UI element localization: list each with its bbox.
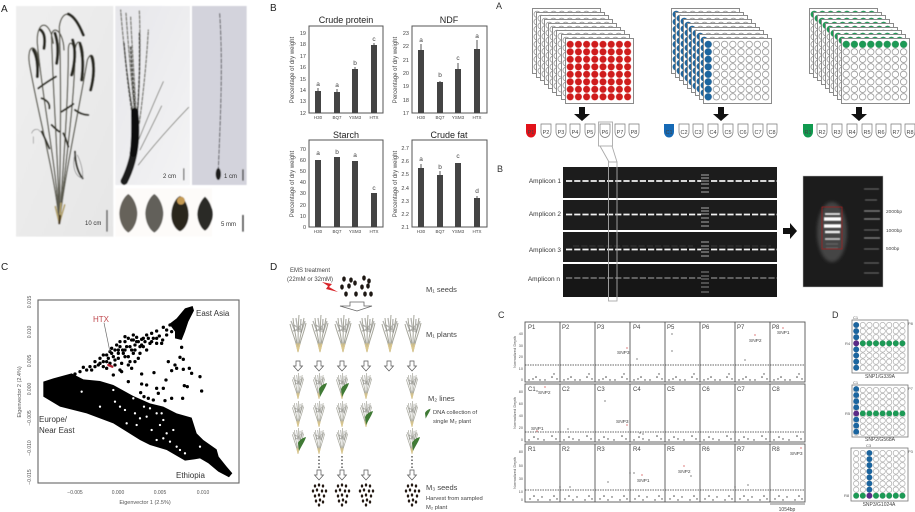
label: Amplicon 3: Amplicon 3 (529, 247, 561, 254)
scale label: 2 cm: 2 cm (163, 174, 176, 180)
chart: crude fat: a (419, 156, 423, 163)
chart: crude fat: 2.1 (401, 225, 409, 231)
chart: crude fat: 2.3 (401, 199, 409, 205)
panel label: left A: A (1, 4, 8, 15)
arrow: seeds to plants (340, 302, 372, 311)
plate: SNP3/G1024A (844, 443, 914, 508)
photo: spike with awns (115, 6, 190, 185)
chart: normalized depth small multiples: 20 (519, 355, 523, 359)
tubes: C1 to C8 (664, 124, 777, 138)
chart: normalized depth small multiples: C3 (597, 387, 605, 393)
label: Amplicon 1: Amplicon 1 (529, 178, 561, 185)
chart: NDF: 23 (403, 31, 409, 37)
dotted continuation (319, 456, 412, 468)
chart: crude protein: H30 (314, 115, 323, 120)
plate: SNP1/G339A: C1 (853, 315, 859, 320)
chart: crude protein: HTX (370, 115, 378, 120)
tubes: P1 to P8: P4 (572, 130, 578, 136)
chart: normalized depth small multiples: R4 (633, 447, 641, 453)
chart: normalized depth small multiples: P7 (737, 325, 745, 331)
chart: PCA scatter: −0.005 (27, 410, 33, 426)
chart: NDF: NDF (440, 15, 459, 25)
chart: normalized depth small multiples: P8 (772, 325, 780, 331)
chart: starch: 30 (300, 191, 306, 197)
chart: normalized depth small multiples: P3 (597, 325, 605, 331)
chart: normalized depth small multiples: 50 (519, 464, 523, 468)
chart: normalized depth small multiples: SNP2 (749, 338, 762, 344)
highlighted lane from P6 tube to gels (598, 122, 617, 301)
chart: starch: a (316, 150, 320, 157)
arrow: to enlarged gel (783, 223, 797, 239)
legend: DNA collection: DNA collection of (433, 410, 478, 416)
chart: crude protein: Crude protein (319, 15, 373, 25)
gel: amplicon panels (563, 167, 777, 297)
chart: starch: 10 (300, 214, 306, 220)
chart: PCA scatter: 0.000 (27, 383, 33, 395)
chart: normalized depth small multiples: C7 (737, 387, 745, 393)
tubes: P1 to P8: P1 (528, 130, 534, 136)
tubes: C1 to C8: C8 (768, 130, 776, 136)
label: 500bp: 500bp (886, 246, 900, 252)
chart: starch: 40 (300, 180, 306, 186)
chart: normalized depth small multiples: 40 (519, 414, 523, 418)
chart: crude protein: 15 (300, 77, 306, 83)
label: M3 seeds: M₃ seeds (426, 483, 458, 492)
chart: normalized depth small multiples: 30 (519, 344, 523, 348)
plate stack: blue, column pool (672, 8, 772, 104)
chart: NDF (393, 15, 487, 120)
chart: normalized depth small multiples: P1 (528, 325, 536, 331)
chart: crude protein: YSM3 (349, 115, 362, 120)
chart: crude fat: c (456, 153, 460, 160)
chart: crude fat: 2.2 (401, 212, 409, 218)
chart: PCA scatter: Ethiopia (176, 471, 205, 480)
chart: normalized depth small multiples: R1 (528, 447, 536, 453)
diagram: EMS mutagenesis workflow (287, 268, 483, 511)
M3 seed clusters (312, 483, 420, 507)
chart: normalized depth small multiples: SNP2 (678, 469, 691, 475)
chart: PCA scatter: Eigenvector 2 (2.4%) (17, 366, 23, 418)
chart: normalized depth small multiples: 10 (519, 490, 523, 494)
chart: normalized depth small multiples: 60 (519, 402, 523, 406)
chart: crude fat: 2.7 (401, 146, 409, 152)
panel label: left C: C (1, 262, 8, 273)
chart: crude protein: BQ7 (332, 115, 342, 120)
chart: normalized depth small multiples: P5 (667, 325, 675, 331)
chart: PCA scatter: 0.005 (154, 490, 166, 496)
chart: PCA scatter: East Asia (196, 309, 230, 318)
chart: crude fat: Percentage of dry weight (393, 150, 399, 217)
chart: starch (290, 130, 383, 234)
chart: normalized depth small multiples: 0 (521, 438, 523, 442)
label: Amplicon 2: Amplicon 2 (529, 211, 561, 218)
plate: SNP1/G339A: P8 (908, 321, 914, 326)
chart: NDF: a (419, 37, 423, 44)
panel label: right A: A (496, 1, 502, 11)
scale label: 1 cm: 1 cm (224, 174, 237, 180)
chart: crude protein: 12 (300, 111, 306, 117)
plate: SNP2/G568A: C1 (853, 380, 859, 385)
chart: normalized depth small multiples: P2 (562, 325, 570, 331)
chart: crude fat: d (475, 188, 479, 195)
arrows: plates to tubes (574, 107, 867, 121)
chart: normalized depth small multiples: SNP1 (777, 330, 790, 336)
tubes: R1 to R8: R6 (877, 130, 885, 136)
chart: crude fat: 2.6 (401, 159, 409, 165)
chart: normalized depth small multiples: SNP2 (538, 390, 551, 396)
plate: SNP3/G1024A: P3 (908, 449, 914, 454)
label: 2000bp: 2000bp (886, 209, 902, 215)
chart: starch: 70 (300, 147, 306, 153)
chart: normalized depth small multiples: Normalized Depth (512, 457, 517, 489)
chart: crude protein: a (316, 81, 320, 88)
label: M1 seeds: M₁ seeds (426, 285, 457, 294)
chart: normalized depth small multiples: 10 (519, 367, 523, 371)
chart: PCA scatter: 0.015 (27, 296, 33, 308)
chart: NDF: 19 (403, 84, 409, 90)
tubes: P1 to P8: P2 (543, 130, 549, 136)
photo: whole plant (16, 6, 113, 237)
chart: crude protein: 17 (300, 54, 306, 60)
chart: crude fat: YSM3 (452, 229, 465, 234)
chart: crude protein: b (353, 60, 357, 67)
chart: starch: 0 (303, 225, 306, 231)
plate: SNP2/G568A: R5 (845, 411, 851, 416)
chart: NDF: BQ7 (435, 115, 445, 120)
arrows: M2 to M3 (314, 470, 416, 480)
chart: PCA scatter: Near East (39, 426, 75, 435)
tubes: R1 to R8: R7 (892, 130, 900, 136)
chart: normalized depth small multiples: R3 (597, 447, 605, 453)
panel label: B bars: B (270, 3, 277, 14)
chart: normalized depth small multiples: C2 (562, 387, 570, 393)
photo: four grains (106, 188, 244, 237)
chart: NDF: a (475, 33, 479, 40)
tubes: R1 to R8: R2 (818, 130, 826, 136)
text: harvest note: Harvest from sampled (426, 496, 483, 502)
chart: crude fat: Crude fat (430, 130, 468, 140)
gel: enlarged smear with ladder (803, 176, 883, 287)
panel label: right D: D (832, 310, 839, 320)
text: EMS treatment: (22mM or 32mM) (287, 277, 333, 283)
chart: starch: 60 (300, 158, 306, 164)
chart: crude protein: Percentage of dry weight (290, 36, 296, 103)
chart: crude fat: b (438, 164, 442, 171)
chart: normalized depth small multiples: 0 (521, 378, 523, 382)
chart: PCA scatter: Eigenvector 1 (2.5%) (119, 500, 171, 506)
chart: normalized depth small multiples: 30 (519, 477, 523, 481)
chart: normalized depth small multiples: Normalized Depth (512, 336, 517, 368)
chart: normalized depth small multiples: 80 (519, 450, 523, 454)
tubes: R1 to R8: R3 (833, 130, 841, 136)
chart: PCA scatter: 0.000 (112, 490, 124, 496)
tubes: R1 to R8: R8 (906, 130, 914, 136)
seeds: M1 seeds (340, 275, 373, 297)
chart: crude protein: 19 (300, 31, 306, 37)
chart: crude protein: a (335, 82, 339, 89)
chart: crude protein: c (372, 36, 376, 43)
chart: normalized depth small multiples: C1 (528, 387, 536, 393)
chart: crude fat: H30 (417, 229, 426, 234)
chart: normalized depth small multiples: R2 (562, 447, 570, 453)
chart: starch: Starch (333, 130, 359, 140)
plate: SNP2/G568A: SNP2/G568A (865, 437, 896, 443)
tubes: P1 to P8: P7 (617, 130, 623, 136)
chart: starch: H30 (314, 229, 323, 234)
tubes: P1 to P8: P8 (631, 130, 637, 136)
chart: crude protein: 18 (300, 42, 306, 48)
chart: crude protein: 13 (300, 99, 306, 105)
M1 plants row (290, 315, 421, 352)
chart: NDF: H30 (417, 115, 426, 120)
chart: normalized depth small multiples: SNP3 (616, 419, 629, 425)
chart: starch: YSM3 (349, 229, 362, 234)
chart: PCA scatter: 0.005 (27, 355, 33, 367)
label: 1000bp: 1000bp (886, 228, 902, 234)
tubes: P1 to P8: P5 (587, 130, 593, 136)
tubes: C1 to C8: C4 (709, 130, 717, 136)
plate stack: red, whole plate (532, 8, 634, 104)
panel label: right B: B (497, 164, 503, 174)
chart: starch: b (335, 149, 339, 156)
chart: starch: 50 (300, 169, 306, 175)
text: harvest note: M₂ plant (426, 505, 448, 511)
label: Amplicon n: Amplicon n (528, 276, 560, 283)
plate: SNP1/G339A (845, 315, 914, 380)
plate: SNP3/G1024A: R8 (844, 493, 850, 498)
plate: SNP3/G1024A: SNP3/G1024A (863, 502, 896, 508)
panel: barley plant photographs (16, 6, 247, 237)
chart: crude protein: 16 (300, 65, 306, 71)
chart: starch: HTX (370, 229, 378, 234)
chart: PCA scatter (17, 296, 239, 506)
chart: NDF: 17 (403, 111, 409, 117)
label: M1 plants: M₁ plants (426, 330, 457, 339)
M2 plants rows (292, 373, 420, 454)
chart: normalized depth small multiples: SNP3 (617, 350, 630, 356)
chart: normalized depth small multiples: C4 (633, 387, 641, 393)
chart: NDF: YSM3 (452, 115, 465, 120)
chart: NDF: 22 (403, 44, 409, 50)
tubes: C1 to C8: C1 (665, 130, 673, 136)
panel label: right C: C (498, 310, 505, 320)
chart: normalized depth small multiples: C8 (772, 387, 780, 393)
chart: crude fat (393, 130, 487, 234)
chart: normalized depth small multiples: R5 (667, 447, 675, 453)
plate stack: green, row pool (810, 8, 910, 104)
chart: crude fat: HTX (472, 229, 482, 234)
arrows: M1 to M2 (294, 361, 416, 371)
chart: starch: a (353, 152, 357, 159)
tubes: P1 to P8 (526, 124, 639, 138)
chart: starch: c (372, 185, 376, 192)
tubes: R1 to R8: R5 (863, 130, 871, 136)
chart: normalized depth small multiples: SNP1 (637, 478, 650, 484)
chart: normalized depth small multiples: C5 (667, 387, 675, 393)
tubes: R1 to R8: R4 (848, 130, 856, 136)
chart: crude fat: 2.4 (401, 186, 409, 192)
chart: PCA scatter: HTX (93, 315, 110, 324)
chart: NDF: HTX (472, 115, 482, 120)
plate: SNP1/G339A: SNP1/G339A (865, 374, 896, 380)
chart: normalized depth small multiples: 40 (519, 332, 523, 336)
icon: red lightning (322, 282, 338, 292)
chart: normalized depth small multiples: P4 (633, 325, 641, 331)
chart: normalized depth small multiples: R6 (702, 447, 710, 453)
chart: crude protein: 14 (300, 88, 306, 94)
chart: normalized depth small multiples: SNP3 (790, 451, 803, 457)
chart: NDF: c (456, 55, 460, 62)
chart: NDF: 20 (403, 71, 409, 77)
tubes: C1 to C8: C5 (724, 130, 732, 136)
chart: NDF: 21 (403, 58, 409, 64)
chart: starch: BQ7 (332, 229, 342, 234)
legend: DNA collection (425, 409, 478, 425)
scale label: 5 mm: 5 mm (221, 222, 236, 228)
tubes: P1 to P8: P3 (558, 130, 564, 136)
chart: starch: 20 (300, 203, 306, 209)
plate: SNP2/G568A (845, 380, 914, 443)
chart: normalized depth small multiples: 0 (521, 498, 523, 502)
tubes: R1 to R8: R1 (804, 130, 812, 136)
chart: crude protein (290, 15, 383, 120)
chart: normalized depth small multiples: P6 (702, 325, 710, 331)
chart: NDF: Percentage of dry weight (393, 36, 399, 103)
tubes: C1 to C8: C7 (754, 130, 762, 136)
tubes: R1 to R8 (803, 124, 915, 138)
text: EMS treatment: EMS treatment (290, 268, 330, 274)
chart: normalized depth small multiples: SNP1 (531, 426, 544, 432)
chart: starch: Percentage of dry weight (290, 150, 296, 217)
plate: SNP1/G339A: R4 (845, 341, 851, 346)
plate: SNP3/G1024A: C3 (866, 443, 872, 448)
chart: normalized depth small multiples: R8 (772, 447, 780, 453)
chart: PCA scatter: −0.005 (67, 490, 83, 496)
legend: DNA collection: single M₂ plant (433, 419, 471, 425)
tubes: C1 to C8: C3 (694, 130, 702, 136)
chart: PCA scatter: −0.010 (27, 440, 33, 456)
tubes: P1 to P8: P6 (602, 130, 608, 136)
chart: crude fat: 2.5 (401, 172, 409, 178)
chart: PCA scatter: 0.010 (27, 326, 33, 338)
chart: NDF: b (438, 72, 442, 79)
tubes: C1 to C8: C2 (680, 130, 688, 136)
photo: single awned grain (192, 6, 247, 185)
chart: PCA scatter: 0.010 (197, 490, 209, 496)
panel label: left D: D (270, 262, 277, 273)
tubes: C1 to C8: C6 (739, 130, 747, 136)
chart: PCA scatter: −0.015 (27, 469, 33, 485)
chart: PCA scatter: Europe/ (39, 415, 68, 424)
chart: normalized depth small multiples: C6 (702, 387, 710, 393)
label: M2 lines: M₂ lines (428, 394, 455, 403)
chart: crude fat: BQ7 (435, 229, 445, 234)
chart: NDF: 18 (403, 98, 409, 104)
chart: normalized depth small multiples: 80 (519, 390, 523, 394)
chart: normalized depth small multiples: Normalized Depth (512, 397, 517, 429)
scale bar: 1054bp (770, 504, 805, 512)
chart: normalized depth small multiples (512, 322, 805, 512)
chart: normalized depth small multiples: R7 (737, 447, 745, 453)
plate: SNP2/G568A: P7 (908, 386, 914, 391)
chart: normalized depth small multiples: 20 (519, 426, 523, 430)
scale label: 10 cm: 10 cm (85, 221, 101, 227)
